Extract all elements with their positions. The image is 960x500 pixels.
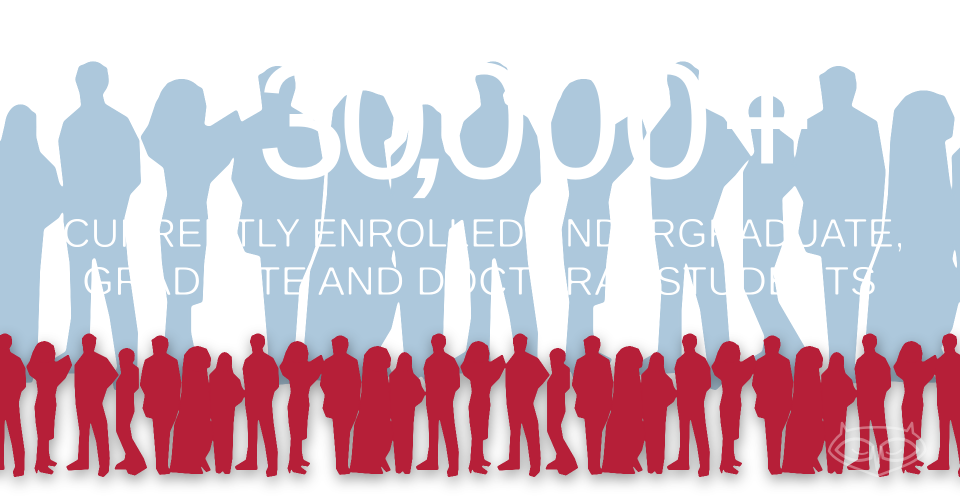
big number: , bbox=[412, 60, 450, 206]
subtitle: CURRENTLY ENROLLED UNDERGRADUATE, bbox=[62, 210, 905, 256]
big number: 30 bbox=[256, 29, 430, 213]
blue silhouette crowd bbox=[0, 62, 960, 390]
big number: 000+ bbox=[438, 29, 815, 213]
red silhouette crowd bbox=[0, 334, 960, 477]
icon: owl logo watermark bbox=[829, 423, 925, 476]
subtitle bbox=[62, 210, 905, 304]
subtitle: GRADUATE AND DOCTORAL STUDENTS bbox=[82, 258, 877, 304]
